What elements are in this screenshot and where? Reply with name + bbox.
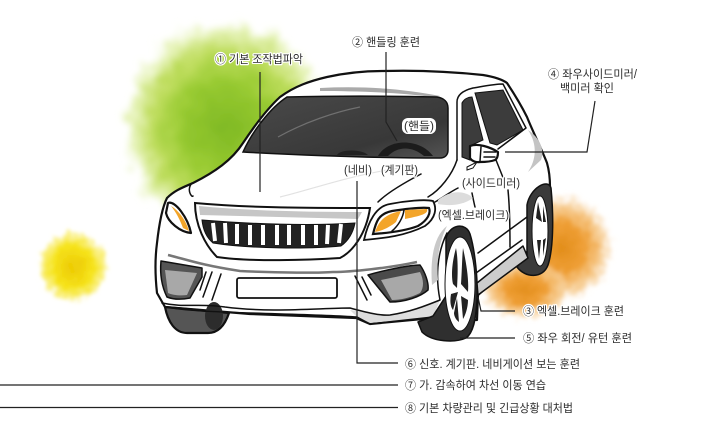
left headlight — [166, 203, 191, 233]
label 5: ⑤ 좌우 회전/ 유턴 훈련 — [523, 332, 632, 345]
roof highlight — [320, 87, 440, 97]
license plate — [237, 278, 337, 298]
rear wheel — [517, 184, 553, 275]
right fog lamp — [368, 265, 428, 302]
label 4: ④ 좌우사이드미러/ — [548, 68, 638, 81]
callout: side mirror: (사이드미러) — [462, 177, 520, 190]
shoulder shading — [528, 130, 542, 172]
grille slats — [213, 223, 341, 245]
leader line 7 — [0, 384, 398, 386]
hood crease — [280, 168, 400, 197]
label 4 second line: 백미러 확인 — [560, 82, 614, 95]
bumper lower lines — [162, 233, 447, 324]
leader line 5 — [460, 337, 515, 339]
callout: pedals: (엑셀.브레이크) — [438, 209, 509, 222]
windshield — [243, 96, 448, 158]
label 6: ⑥ 신호. 계기판. 네비게이션 보는 훈련 — [405, 358, 580, 371]
door frame — [457, 84, 526, 160]
car illustration — [156, 71, 553, 341]
front wheel arch shading — [432, 226, 447, 285]
leader line 2 — [386, 52, 397, 141]
wheel openings — [450, 248, 468, 322]
green paint splash — [122, 20, 330, 236]
callout backing: handle — [402, 118, 436, 134]
leader line 4 — [505, 101, 595, 152]
leader line 1 — [259, 72, 261, 192]
yellow paint splash — [38, 231, 108, 303]
leader line 8 — [0, 406, 398, 408]
left fog lamp — [161, 261, 202, 299]
orange paint splash — [481, 194, 614, 320]
door sill line — [476, 240, 522, 273]
left front tyre — [165, 302, 229, 333]
side mirror — [467, 145, 498, 170]
label 2: ② 핸들링 훈련 — [352, 36, 420, 49]
grille — [195, 203, 370, 260]
callout: handle: (핸들) — [404, 120, 434, 133]
callout: navigation: (네비) — [344, 164, 372, 177]
bumper lower lip — [350, 300, 440, 323]
right headlight — [364, 200, 435, 240]
dashboard and steering wheel — [337, 142, 433, 156]
bumper vents — [200, 272, 371, 300]
callout: instrument cluster: (계기판) — [381, 164, 418, 177]
leader line 6 — [357, 181, 398, 363]
windshield glare — [278, 107, 360, 137]
side windows — [462, 90, 523, 160]
label 3: ③ 엑셀.브레이크 훈련 — [523, 305, 624, 318]
label 8: ⑧ 기본 차량관리 및 긴급상황 대처법 — [405, 402, 573, 415]
bumper upper line — [168, 255, 417, 273]
fender shading — [438, 192, 473, 205]
side sill — [477, 246, 528, 295]
body contour lines — [189, 160, 527, 253]
front right wheel — [418, 226, 477, 341]
leader line 3 — [478, 297, 515, 311]
body silhouette — [156, 71, 550, 324]
label 7: ⑦ 가. 감속하여 차선 이동 연습 — [405, 378, 546, 392]
label 1: ① 기본 조작법파악 — [215, 53, 303, 66]
